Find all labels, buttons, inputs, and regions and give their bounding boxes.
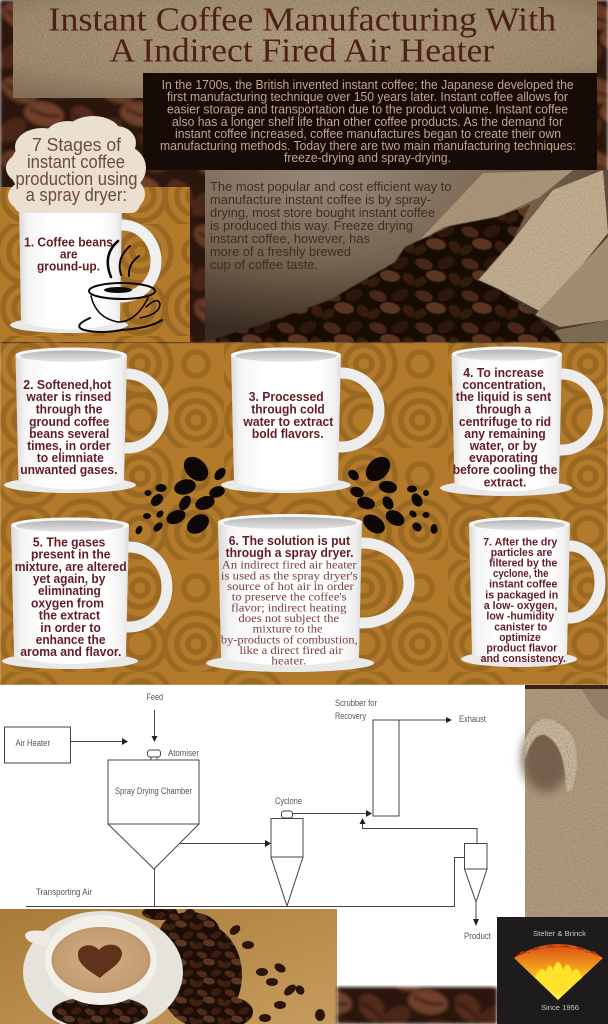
cyclone: Cyclone (275, 796, 302, 806)
mug: stage 4: 4. To increase (463, 365, 544, 380)
panel: history intro: easier storage and transportation due to the product volume. Instant coffee (167, 102, 568, 116)
mug: stage 3: water to extract (242, 414, 334, 429)
mug: stage 4: through a (476, 402, 532, 416)
atomiser (148, 748, 199, 760)
mug: stage 4: any remaining (464, 426, 546, 441)
icon: left coffee bean cluster (134, 452, 228, 538)
callout: 7 stages cloud (6, 116, 146, 213)
mug: stage 3 (221, 348, 379, 493)
icon: steaming coffee cup (79, 241, 162, 332)
mug: stage 6: like a direct fired air (240, 645, 343, 657)
text: spray drying note: manufacture instant coffee is by spray- (210, 192, 431, 207)
mug: stage 2: to elimniate (37, 450, 104, 465)
mug: stage 6: by-products of combustion, (221, 634, 358, 646)
title: Instant Coffee Manufacturing With (48, 2, 556, 39)
transporting air line: Transporting Air (36, 887, 92, 897)
mug: stage 5 (2, 518, 167, 669)
saucer (23, 911, 183, 1024)
panel: burlap title (13, 0, 597, 98)
beans photo bottom (337, 987, 497, 1024)
mug: stage 3: bold flavors. (252, 426, 324, 441)
mug: stage 2: ground coffee (29, 414, 109, 429)
mug: stage 2: through the (36, 402, 102, 416)
air heater box (4, 727, 70, 763)
text: stage 1: are (60, 246, 78, 262)
panel: orange pattern behind stage 1 (0, 187, 190, 342)
mug: stage 7: 7. After the dry (483, 536, 558, 548)
scrubber: Scrubber for (335, 698, 377, 708)
mug: stage 7: and consistency. (481, 653, 566, 665)
flame fan (514, 944, 603, 1000)
panel: history intro: In the 1700s, the British invented instant coffee; the Japanese developed the (162, 77, 574, 92)
mug: stage 2: times, in order (27, 438, 110, 453)
mug: stage 2: water is rinsed (25, 389, 111, 404)
mug: stage 6: through a spray dryer. (226, 545, 354, 560)
mug: stage 6: source of hot air in order (227, 581, 354, 593)
transporting air line (26, 858, 464, 906)
mug: stage 2: unwanted gases. (20, 462, 118, 477)
mug: stage 7: product flavor (486, 643, 558, 655)
mug: stage 5: aroma and flavor. (20, 644, 121, 659)
arrow: air heater to chamber (70, 738, 128, 745)
arrow: exhaust: Exhaust (459, 714, 486, 724)
title (48, 2, 556, 70)
mug: stage 5: 5. The gases (33, 534, 105, 550)
mug: stage 7: filtered by the (489, 557, 557, 569)
spray drying chamber: Spray Drying Chamber (115, 786, 192, 796)
panel: history intro: manufacturing methods. Today there are two main manufacturing techniques: (160, 138, 576, 153)
callout: 7 stages cloud: a spray dryer: (26, 184, 127, 205)
mug: stage 5: eliminating (38, 583, 101, 598)
mug: stage 2: 2. Softened,hot (23, 377, 112, 392)
mug: stage 5: yet again, by (33, 571, 106, 586)
panel: history intro (143, 73, 597, 170)
burlap sack (417, 170, 608, 342)
cup rim (45, 915, 157, 1005)
bean pile (205, 205, 562, 342)
panel: beans and burlap sack photo (205, 170, 608, 342)
small cyclone (464, 844, 487, 902)
mug: stage 7: canister to (494, 621, 548, 633)
arrow: product: Product (464, 931, 491, 941)
spray drying chamber (108, 760, 199, 906)
panel: history intro: instant coffee increased, coffee manufactures began to create their own (175, 126, 561, 141)
text: spray drying note: The most popular and cost efficient way to (210, 179, 452, 194)
text: spray drying note (210, 179, 452, 272)
mug: stage 3: 3. Processed (249, 389, 324, 404)
mug: stage 3: through cold (251, 402, 325, 416)
text: spray drying note: instant coffee, however, has (210, 231, 370, 246)
mug: stage 6: heater. (271, 656, 306, 668)
mug: stage 7 (461, 517, 600, 667)
panel: coffee cup with heart photo (0, 906, 337, 1024)
arrow: product (464, 902, 491, 941)
mug: stage 7: cyclone, the (493, 568, 548, 580)
mug: stage 4: before cooling the (453, 462, 557, 477)
mug: stage 4: extract. (484, 474, 526, 490)
text: stage 1: 1. Coffee beans (24, 234, 113, 250)
logo: Stelter and Brinck: Since 1956 (541, 1003, 579, 1012)
atomiser: Atomiser (168, 748, 199, 758)
chart: spray drying process diagram (4, 692, 491, 941)
text: spray drying note: cup of coffee taste. (210, 257, 318, 272)
mug: stage 5: present in the (31, 546, 110, 562)
coffee bean background (0, 0, 608, 345)
mug: stage 5: enhance the (36, 632, 106, 647)
mug: stage 5: oxygen from (31, 596, 104, 610)
text: stage 1: ground-up. (37, 258, 100, 274)
text: stage 1 (24, 234, 113, 274)
mug: stage 7: optimize (499, 632, 541, 644)
mug: stage 5: in order to (40, 620, 101, 635)
scrubber: Recovery (335, 711, 366, 721)
callout: 7 stages cloud: instant coffee (27, 151, 125, 172)
air heater box: Air Heater (16, 738, 50, 748)
panel: history intro: first manufacturing technique over 150 years later. Instant coffee allows for (167, 89, 569, 104)
callout: 7 stages cloud: 7 Stages of (32, 134, 122, 155)
mug: stage 4 (440, 346, 598, 496)
mug: stage 4: water, or by (469, 438, 538, 453)
mug: stage 6: does not subject the (238, 613, 339, 625)
mug: stage 6: is used as the spray dryer's (221, 570, 358, 582)
mug: stage 6: flavor; indirect heating (231, 602, 347, 614)
arrow: cyclone to scrubber (293, 810, 372, 817)
callout: 7 stages cloud: production using (16, 168, 138, 189)
mug: stage 5: the extract (39, 608, 101, 622)
arrow: exhaust (399, 714, 486, 724)
mug: stage 4: evaporating (469, 450, 538, 465)
panel: history intro: freeze-drying and spray-drying. (284, 150, 451, 165)
mug: stage 1 (10, 205, 156, 333)
mug: stage 4: centrifuge to rid (459, 414, 551, 429)
feed arrow: Feed (146, 692, 163, 702)
text: spray drying note: is produced this way. Freeze drying (210, 218, 413, 233)
mug: stage 6: mixture to the (253, 624, 322, 636)
mug: stage 7: particles are (491, 547, 552, 559)
mug: stage 6: to preserve the coffee's (232, 592, 347, 604)
scattered beans (142, 906, 325, 1024)
mug: stage 6: An indirect fired air heater (222, 560, 357, 572)
panel: white process diagram background (0, 685, 608, 1024)
heart (78, 945, 122, 978)
mug: stage 4: concentration, (462, 377, 546, 392)
arrow: chamber to cyclone (180, 840, 271, 847)
mug: stage 6 (206, 514, 409, 672)
mug: stage 7: instant coffee (489, 579, 557, 591)
text: spray drying note: drying, most store bought instant coffee (210, 205, 435, 220)
mug: stage 2 (4, 348, 163, 493)
icon: right coffee bean cluster (346, 452, 438, 537)
cup handle (25, 931, 50, 945)
scrubber (335, 698, 399, 816)
cyclone (271, 796, 303, 906)
text: spray drying note: more of a freshly brewed (210, 244, 351, 259)
logo: Stelter and Brinck: Stelter & Brinck (533, 929, 586, 938)
coffee (52, 927, 150, 993)
panel: burlap photo right (522, 685, 608, 917)
title: A Indirect Fired Air Heater (110, 33, 495, 70)
mug: stage 7: is packaged in (485, 589, 558, 601)
mug: stage 7: a low- oxygen, (484, 600, 557, 612)
mug: stage 6: 6. The solution is put (229, 533, 351, 548)
mug: stage 2: beans several (29, 426, 109, 441)
mug: stage 7: low -humidity (486, 611, 555, 623)
panel: orange stages background (0, 343, 608, 685)
feed arrow (146, 692, 163, 742)
mug: stage 5: mixture, are altered (15, 559, 127, 574)
return line to scrubber (360, 818, 477, 843)
logo: Stelter and Brinck (497, 917, 608, 1024)
mug: stage 4: the liquid is sent (456, 389, 552, 404)
panel: history intro: also has a longer shelf life than other coffee products. As the demand for (172, 114, 564, 129)
